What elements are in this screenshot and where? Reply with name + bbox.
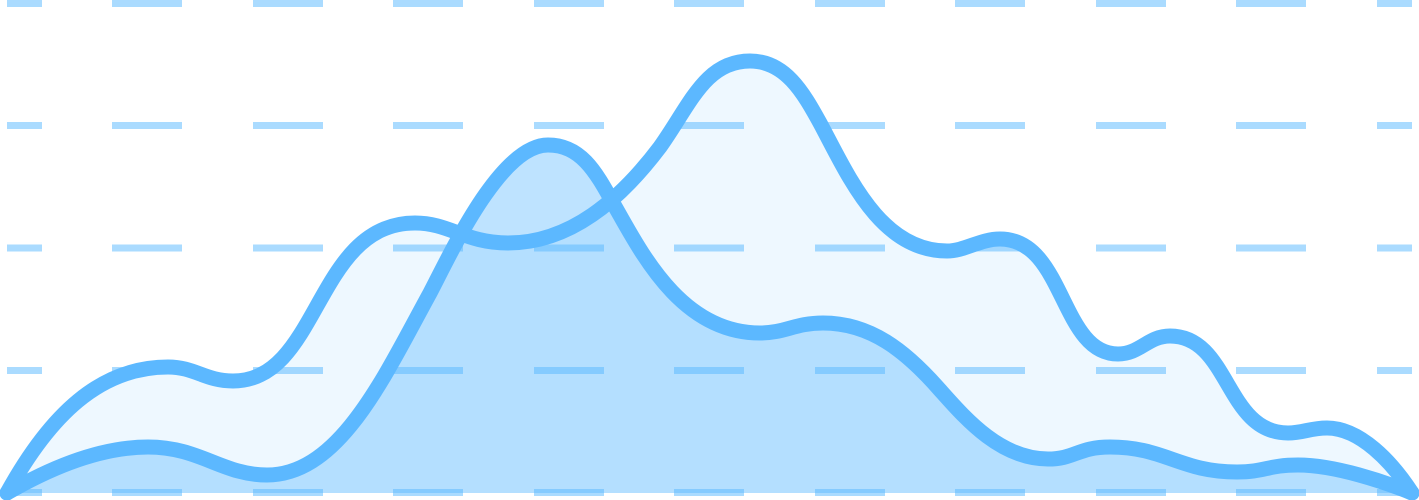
series 2 line <box>7 145 1412 493</box>
series 2 area: darker front curve <box>7 145 1412 493</box>
